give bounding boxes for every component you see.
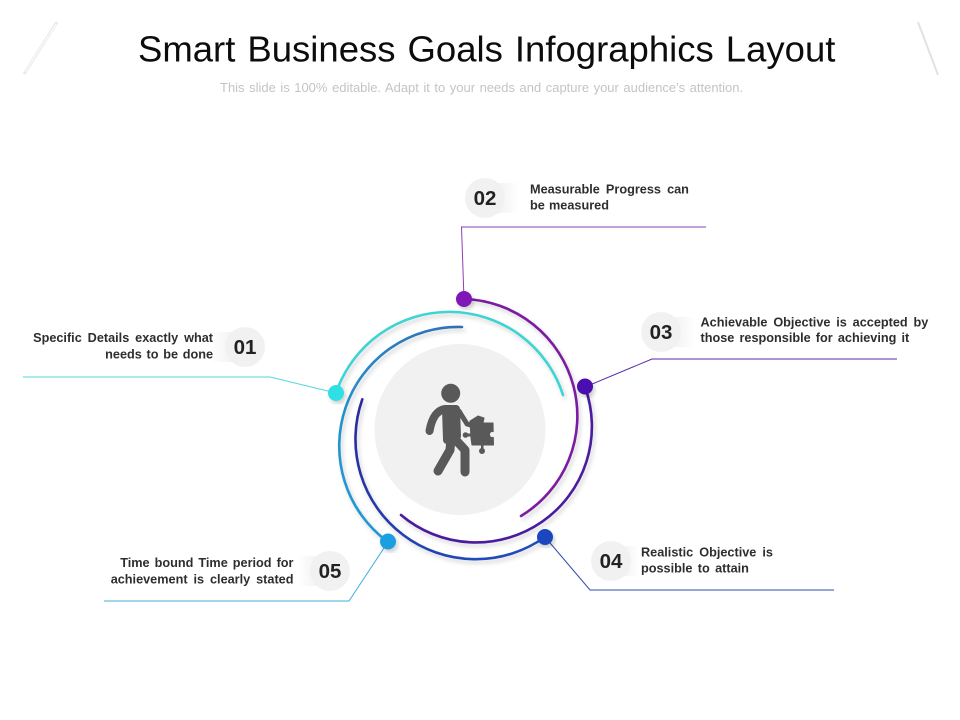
callout 02 [465,178,689,218]
callout 01 [33,327,265,367]
arc: 05 blue [339,327,462,542]
callout 03 [641,312,928,352]
leader line 02 [462,227,706,299]
callout 03: Achievable Objective is accepted by [700,316,928,330]
leader line 04 [545,537,834,590]
dot 02 [456,291,472,307]
title: Smart Business Goals Infographics Layout [138,28,835,70]
callout 02: 02 [474,187,496,210]
dot 01 [328,385,344,401]
dot 04 [537,529,553,545]
leader line 05 [104,542,388,601]
decorative corner stroke right [918,22,938,75]
callout 03: those responsible for achieving it [700,331,910,345]
callout 04: 04 [600,550,623,573]
callout 01: Specific Details exactly what [33,331,214,345]
callout 05: achievement is clearly stated [111,572,294,586]
callout 04 [591,541,773,581]
center circle [374,344,546,515]
decorative corner stroke left [24,22,57,74]
callout 03: 03 [650,321,672,344]
callout 05 [111,551,350,591]
arc: 01 cyan [336,312,563,395]
callout 05: 05 [319,560,341,583]
subtitle: This slide is 100% editable. Adapt it to your needs and capture your audience's attention. [220,80,743,95]
callout 04: Realistic Objective is [641,546,773,560]
callout 02: be measured [530,198,609,212]
callout 04: possible to attain [641,562,749,576]
callout 01: needs to be done [105,348,213,362]
leader line 01 [23,377,336,393]
arc: 02 purple [464,299,577,516]
arc: 04 navy [355,399,545,559]
arc: 03 indigo [401,387,592,542]
callout 02: Measurable Progress can [530,182,689,196]
dot 03 [577,378,593,394]
callout 05: Time bound Time period for [120,556,294,570]
callout 01: 01 [234,336,256,359]
icon: person carrying puzzle piece [430,384,495,472]
dot 05 [380,534,396,550]
leader line 03 [585,359,897,387]
